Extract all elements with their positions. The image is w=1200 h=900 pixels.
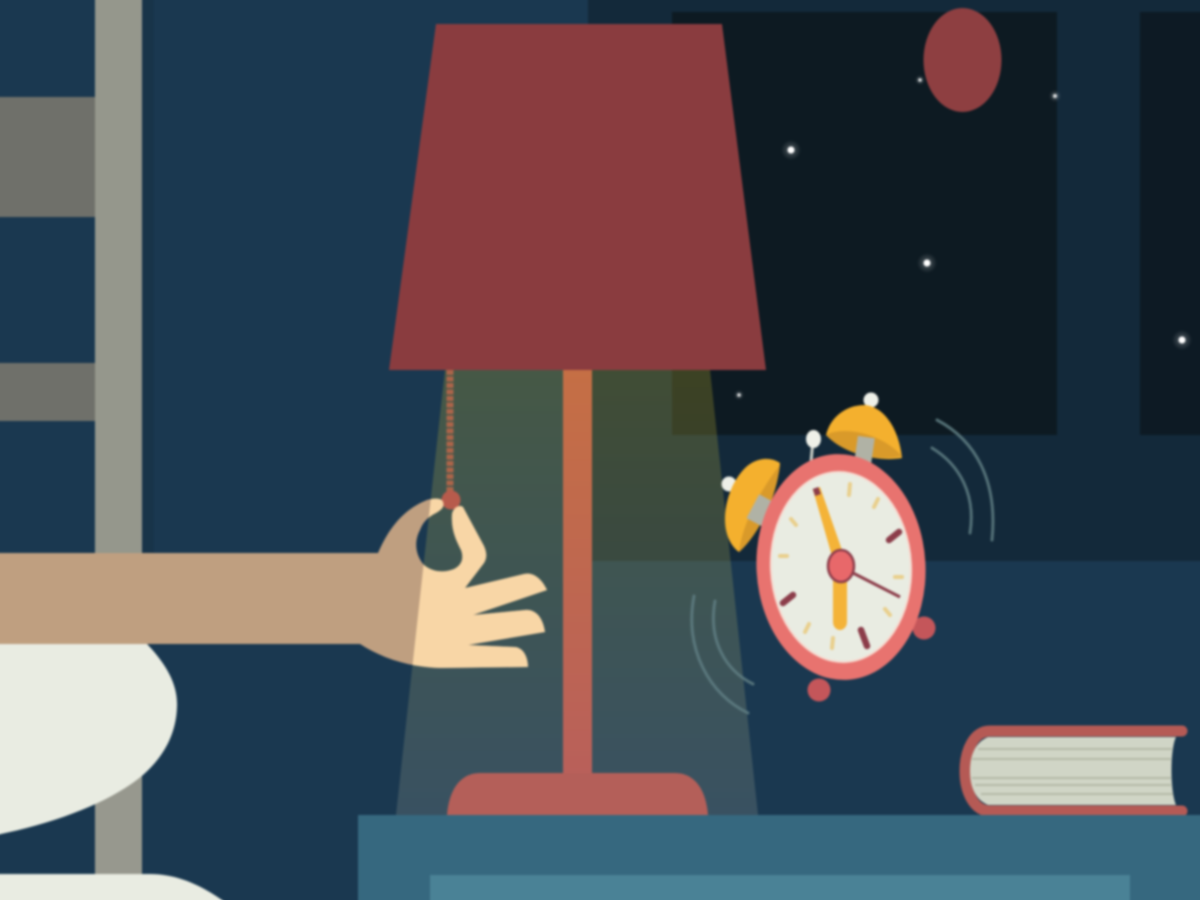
hour hand [833, 567, 847, 630]
vibration arcs [692, 420, 993, 713]
hand lit by lamp [412, 498, 548, 669]
arm and hand [0, 499, 547, 668]
hour ticks [780, 484, 902, 648]
minute hand [813, 487, 843, 556]
left bell [722, 459, 780, 552]
clock face [767, 470, 915, 664]
clock feet [912, 616, 936, 640]
lamp pole [563, 365, 592, 780]
pull chain [442, 370, 460, 510]
second hand [853, 573, 900, 597]
nightstand [358, 815, 1200, 900]
light cone [396, 370, 758, 815]
stars [734, 75, 1192, 400]
lamp base [447, 773, 708, 815]
blanket [0, 874, 260, 900]
clock body [751, 450, 931, 684]
hammer [811, 440, 813, 462]
right bell [826, 392, 902, 464]
book pages [970, 737, 1176, 805]
book [965, 731, 1182, 811]
drawer [430, 875, 1130, 900]
moon [924, 8, 1002, 112]
lamp shade [389, 24, 766, 370]
center hub [828, 550, 854, 582]
window [588, 0, 1200, 561]
pillow [0, 644, 177, 838]
ladder bed frame [0, 0, 154, 880]
alarm clock [722, 392, 936, 702]
